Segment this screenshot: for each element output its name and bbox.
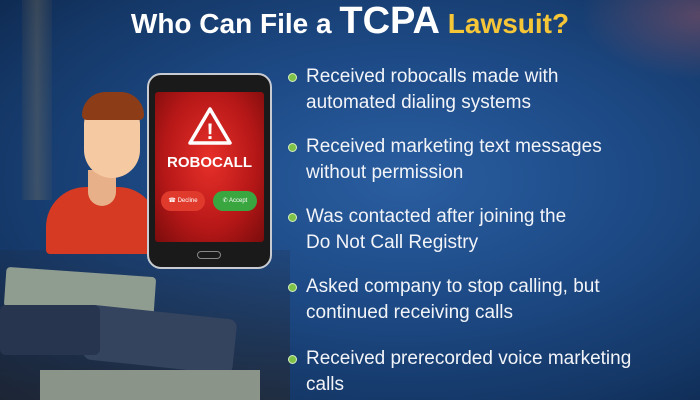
background: desk xyxy=(0,250,290,400)
screen xyxy=(155,92,264,242)
item 1 xyxy=(288,66,558,113)
item 1: Received robocalls made with xyxy=(306,66,558,87)
title: Who Can File a TCPA Lawsuit? xyxy=(131,0,569,42)
item 2 xyxy=(288,136,602,183)
item 5: calls xyxy=(306,374,344,395)
face xyxy=(84,100,140,178)
item 1: automated dialing systems xyxy=(306,92,531,113)
item 3: Do Not Call Registry xyxy=(306,232,478,253)
neck xyxy=(88,170,116,206)
icon: warning triangle: ! xyxy=(206,119,214,144)
body xyxy=(46,187,158,254)
button accept: ✆ Accept xyxy=(223,198,247,204)
item 3: Was contacted after joining the xyxy=(306,206,566,227)
item 5 xyxy=(288,348,631,395)
illustration: phone robocall xyxy=(147,73,272,269)
illustration: calculator xyxy=(83,304,237,375)
item 3 xyxy=(288,206,566,253)
bullet list xyxy=(288,66,631,395)
button accept xyxy=(213,191,257,211)
background: flag hint top right xyxy=(580,0,700,80)
hair xyxy=(82,92,144,120)
background: scales of justice xyxy=(22,0,52,200)
item 5: Received prerecorded voice marketing xyxy=(306,348,631,369)
button decline: ☎ Decline xyxy=(168,198,198,204)
item 4 xyxy=(288,276,600,323)
icon: warning triangle xyxy=(188,107,232,145)
label: ROBOCALL xyxy=(167,154,252,171)
item 4: continued receiving calls xyxy=(306,302,513,323)
item 2: without permission xyxy=(306,162,463,183)
item 4: Asked company to stop calling, but xyxy=(306,276,600,297)
illustration: money stack xyxy=(4,267,156,317)
item 2: Received marketing text messages xyxy=(306,136,602,157)
illustration: person xyxy=(46,92,147,254)
button decline xyxy=(161,191,205,211)
